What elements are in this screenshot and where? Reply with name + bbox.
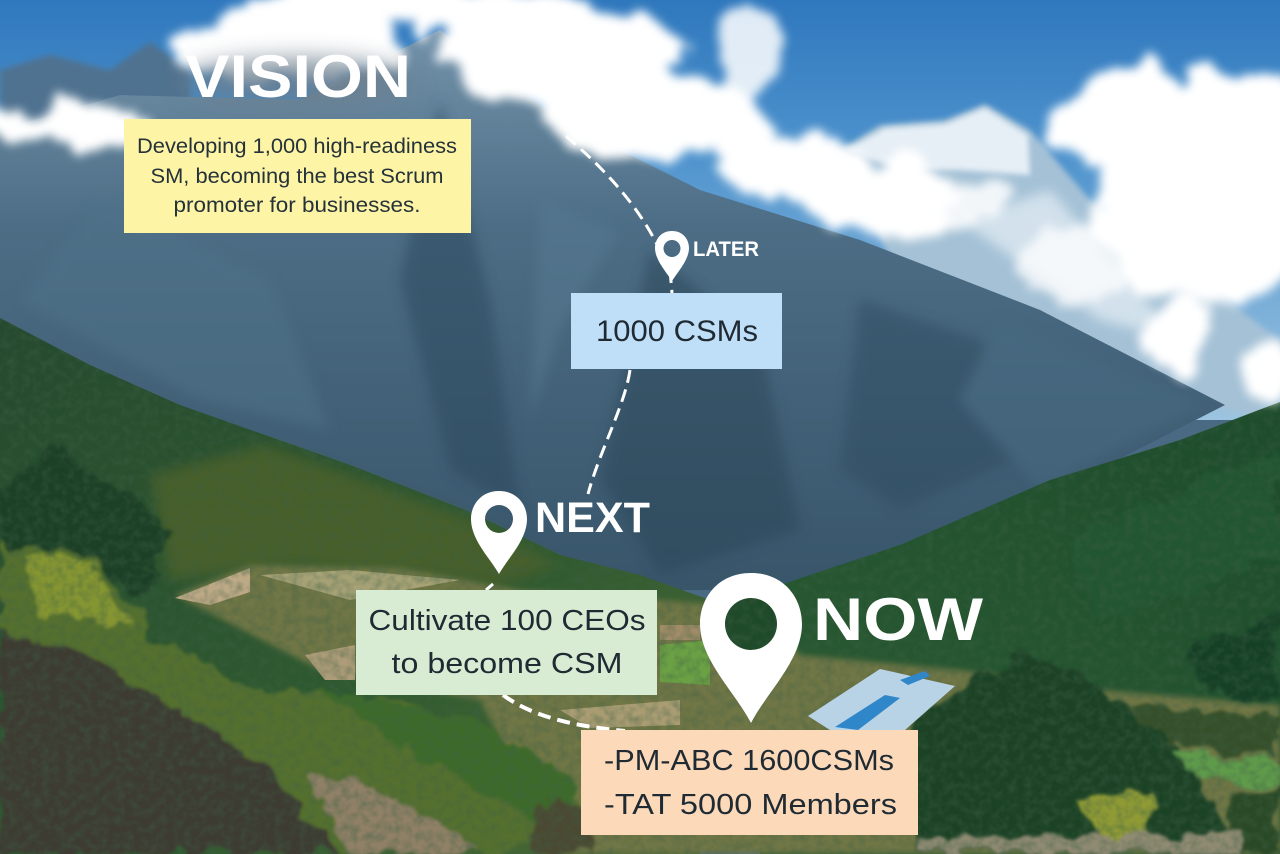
distant snowy peak bbox=[0, 42, 1280, 420]
callout: vision statement: SM, becoming the best Scrum bbox=[150, 165, 444, 188]
callout: current status: -TAT 5000 Members bbox=[604, 789, 897, 821]
foreground left shrubs bbox=[0, 450, 1240, 854]
heading shadow bbox=[180, 58, 416, 106]
blue roofed building bbox=[808, 669, 955, 730]
callout: current status: -PM-ABC 1600CSMs bbox=[604, 745, 894, 777]
callout: vision statement: promoter for businesses. bbox=[174, 194, 420, 217]
valley fields bbox=[175, 565, 1280, 854]
mountain ridges bbox=[20, 100, 1200, 575]
callout: next goal: Cultivate 100 CEOs bbox=[368, 605, 646, 637]
icon: medium location pin bbox=[471, 491, 527, 574]
marker: LATER: LATER bbox=[693, 238, 759, 261]
callout: next goal bbox=[356, 590, 657, 695]
callout: current status bbox=[581, 730, 918, 835]
forest texture bbox=[0, 359, 1280, 854]
callout: later goal: 1000 CSMs bbox=[596, 315, 758, 348]
callout: next goal: to become CSM bbox=[392, 648, 622, 680]
callout: vision statement: Developing 1,000 high-readiness bbox=[137, 135, 457, 158]
sky bbox=[0, 0, 1280, 420]
callout: vision statement bbox=[124, 119, 471, 233]
main mountain bbox=[0, 30, 1225, 590]
right trees bbox=[905, 450, 1280, 854]
heading: VISION: VISION bbox=[185, 43, 411, 110]
right forested hill bbox=[760, 402, 1280, 854]
lit slope on left hill bbox=[150, 445, 560, 585]
marker: LATER bbox=[655, 231, 759, 281]
left forested hill bbox=[0, 318, 710, 854]
callout: later goal bbox=[571, 293, 782, 369]
marker: NEXT bbox=[471, 491, 650, 574]
marker: NOW: NOW bbox=[813, 586, 983, 653]
marker: NEXT: NEXT bbox=[535, 494, 650, 542]
clouds bbox=[0, 0, 1280, 403]
icon: large location pin bbox=[700, 573, 802, 723]
dashed route path bbox=[486, 136, 672, 731]
icon: small location pin bbox=[655, 231, 689, 281]
tree behind NOW pin bbox=[721, 595, 781, 655]
marker: NOW bbox=[700, 573, 983, 723]
